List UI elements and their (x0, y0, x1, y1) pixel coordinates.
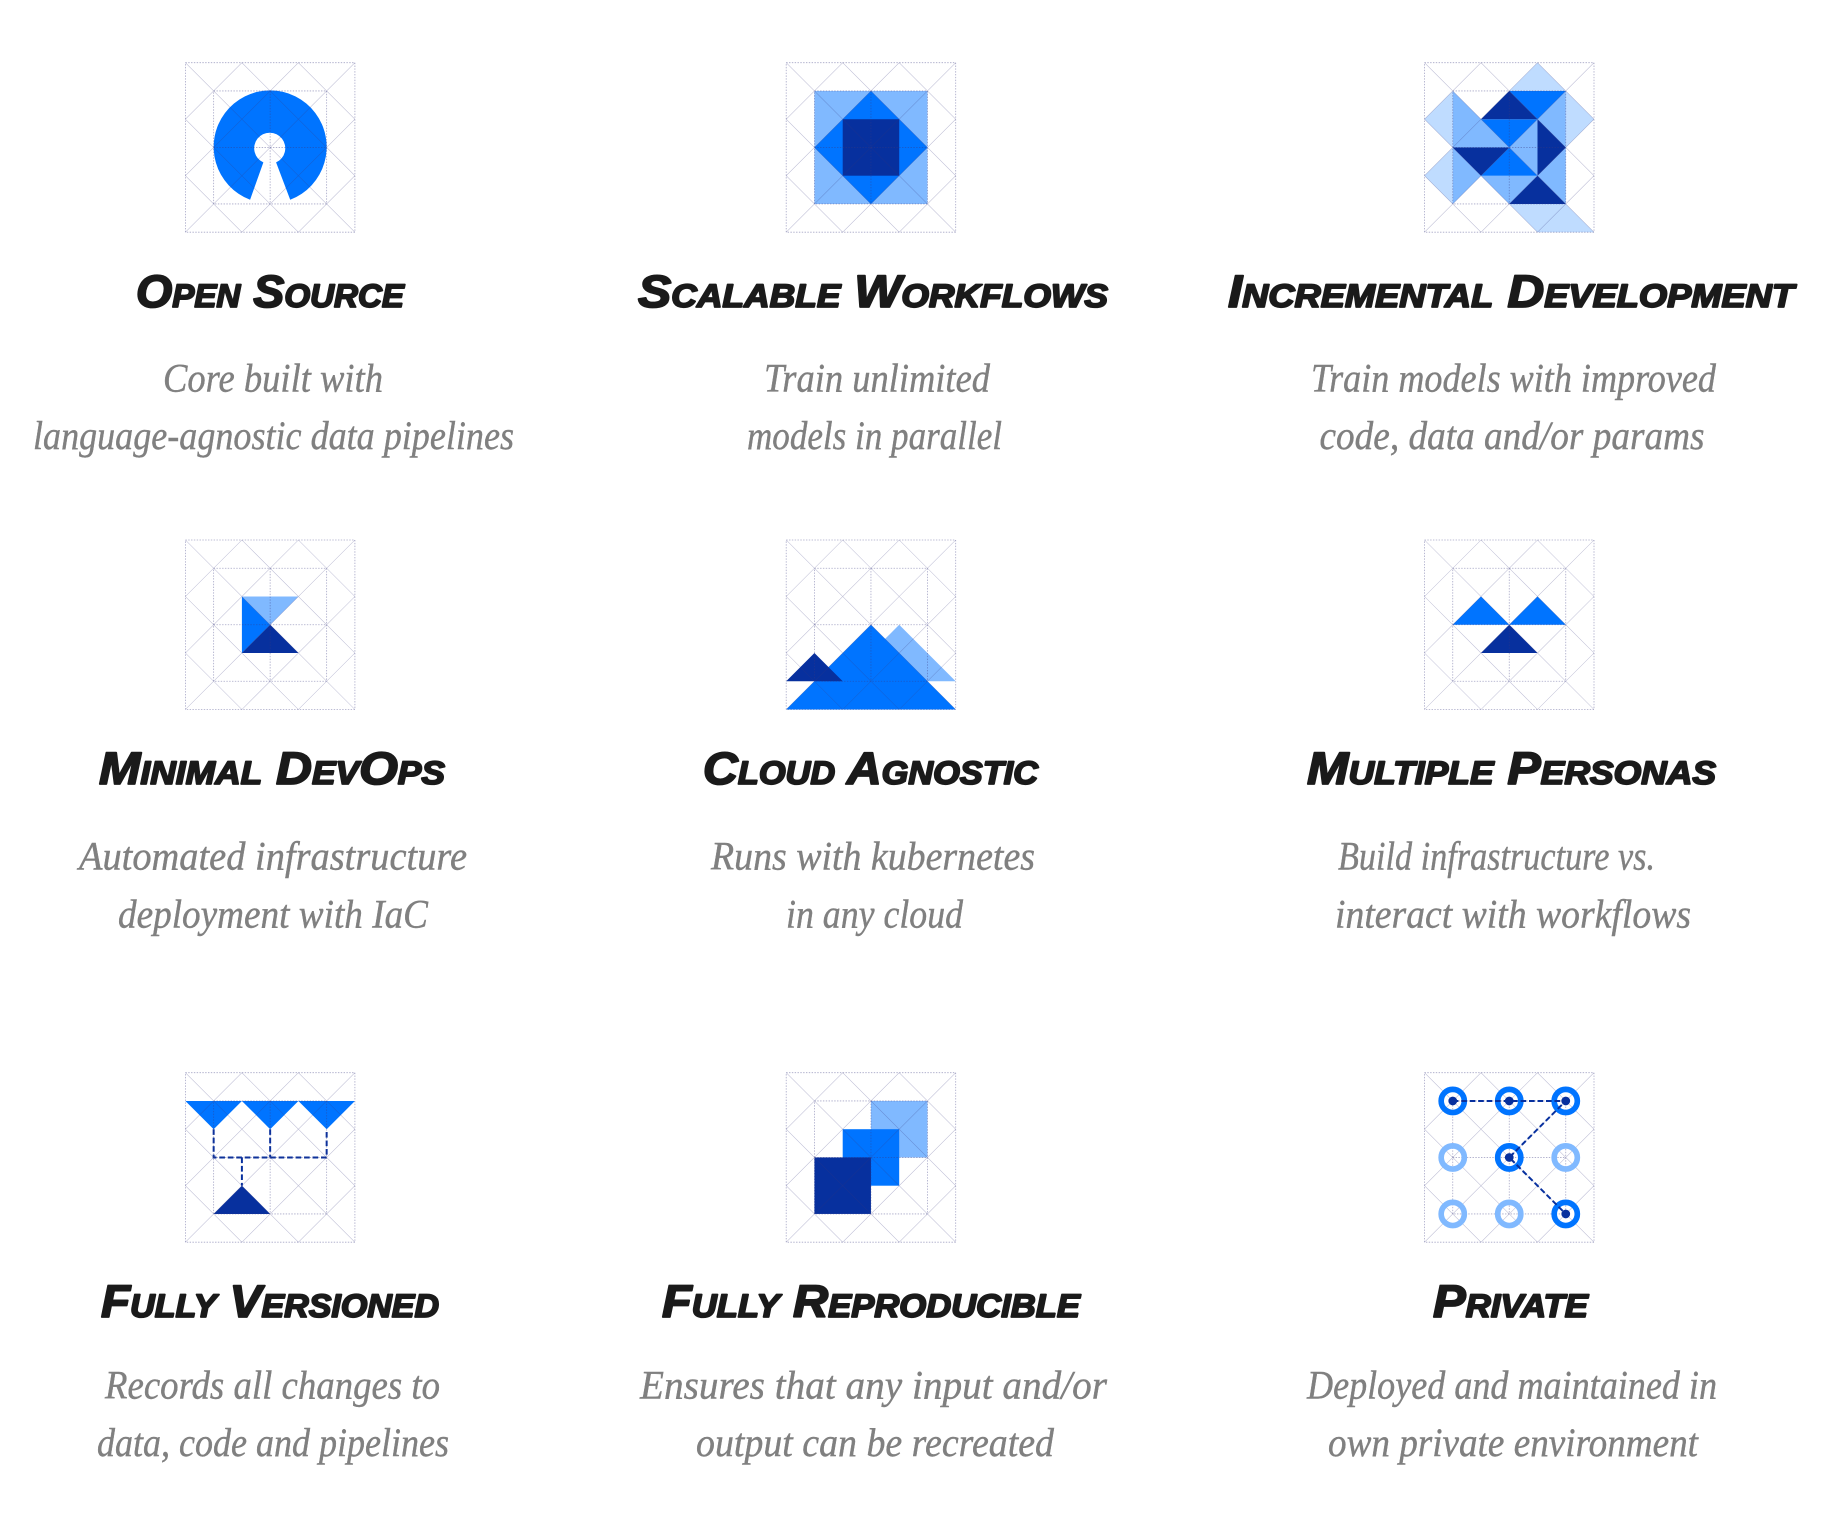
description: Cloud Agnostic: in any cloud (786, 892, 964, 936)
heading: Scalable Workflows: Scalable Workflows (638, 266, 1109, 317)
description: Open Source: Core built with (163, 356, 383, 400)
panel: Multiple Personas (1307, 540, 1717, 936)
description: Multiple Personas: Build infrastructure vs. (1338, 834, 1655, 878)
description: Open Source: language-agnostic data pipelines (33, 413, 514, 458)
description: Private: Deployed and maintained in (1306, 1362, 1717, 1408)
description: Multiple Personas (1335, 834, 1691, 936)
description: Fully Reproducible: output can be recreated (696, 1420, 1055, 1465)
description: Cloud Agnostic (710, 834, 1035, 936)
heading: Open Source: Open Source (136, 266, 406, 317)
panel: Incremental Development (1228, 63, 1797, 458)
panel: Cloud Agnostic (703, 540, 1039, 936)
description: Private: own private environment (1328, 1420, 1699, 1465)
description: Scalable Workflows: models in parallel (747, 413, 1002, 458)
description: Incremental Development: code, data and/or params (1320, 413, 1704, 458)
panel: Scalable Workflows (638, 63, 1109, 458)
icon: stacked squares (786, 1073, 956, 1242)
icon: K-shaped triangles (185, 540, 355, 710)
icon: nested squares (786, 63, 956, 232)
description: Incremental Development (1311, 356, 1717, 458)
icon: open source keyhole logo (185, 63, 355, 232)
heading: Minimal DevOps: Minimal DevOps (99, 743, 446, 794)
icon: mountains (786, 540, 956, 710)
heading: Multiple Personas: Multiple Personas (1307, 743, 1717, 794)
heading: Private: Private (1433, 1276, 1590, 1327)
description: Minimal DevOps: deployment with IaC (118, 892, 429, 936)
panel: Fully Reproducible (639, 1073, 1107, 1465)
description: Fully Reproducible (639, 1362, 1107, 1465)
icon: triangle mosaic (1424, 63, 1594, 232)
heading: Fully Versioned: Fully Versioned (101, 1276, 439, 1327)
heading: Cloud Agnostic: Cloud Agnostic (703, 743, 1039, 794)
description: Fully Versioned (97, 1362, 449, 1465)
panel: Fully Versioned (97, 1073, 449, 1465)
description: Multiple Personas: interact with workflows (1335, 892, 1691, 936)
panel: Private (1306, 1073, 1717, 1465)
heading: Incremental Development: Incremental Development (1228, 266, 1797, 317)
description: Incremental Development: Train models with improved (1311, 356, 1717, 400)
panel: Minimal DevOps (76, 540, 467, 936)
icon: version tree (185, 1073, 355, 1242)
panel: Open Source (33, 63, 514, 458)
heading: Fully Reproducible: Fully Reproducible (662, 1276, 1082, 1327)
icon: three triangles (1424, 540, 1594, 710)
description: Minimal DevOps (76, 834, 467, 936)
description: Fully Reproducible: Ensures that any input and/or (639, 1362, 1107, 1408)
icon: unlock pattern (1424, 1073, 1594, 1242)
description: Fully Versioned: data, code and pipelines (97, 1420, 449, 1465)
description: Scalable Workflows: Train unlimited (764, 356, 991, 400)
description: Private (1306, 1362, 1717, 1465)
description: Scalable Workflows (747, 356, 1002, 458)
description: Minimal DevOps: Automated infrastructure (76, 834, 467, 878)
description: Cloud Agnostic: Runs with kubernetes (710, 834, 1035, 878)
description: Fully Versioned: Records all changes to (104, 1362, 440, 1408)
description: Open Source (33, 356, 514, 458)
